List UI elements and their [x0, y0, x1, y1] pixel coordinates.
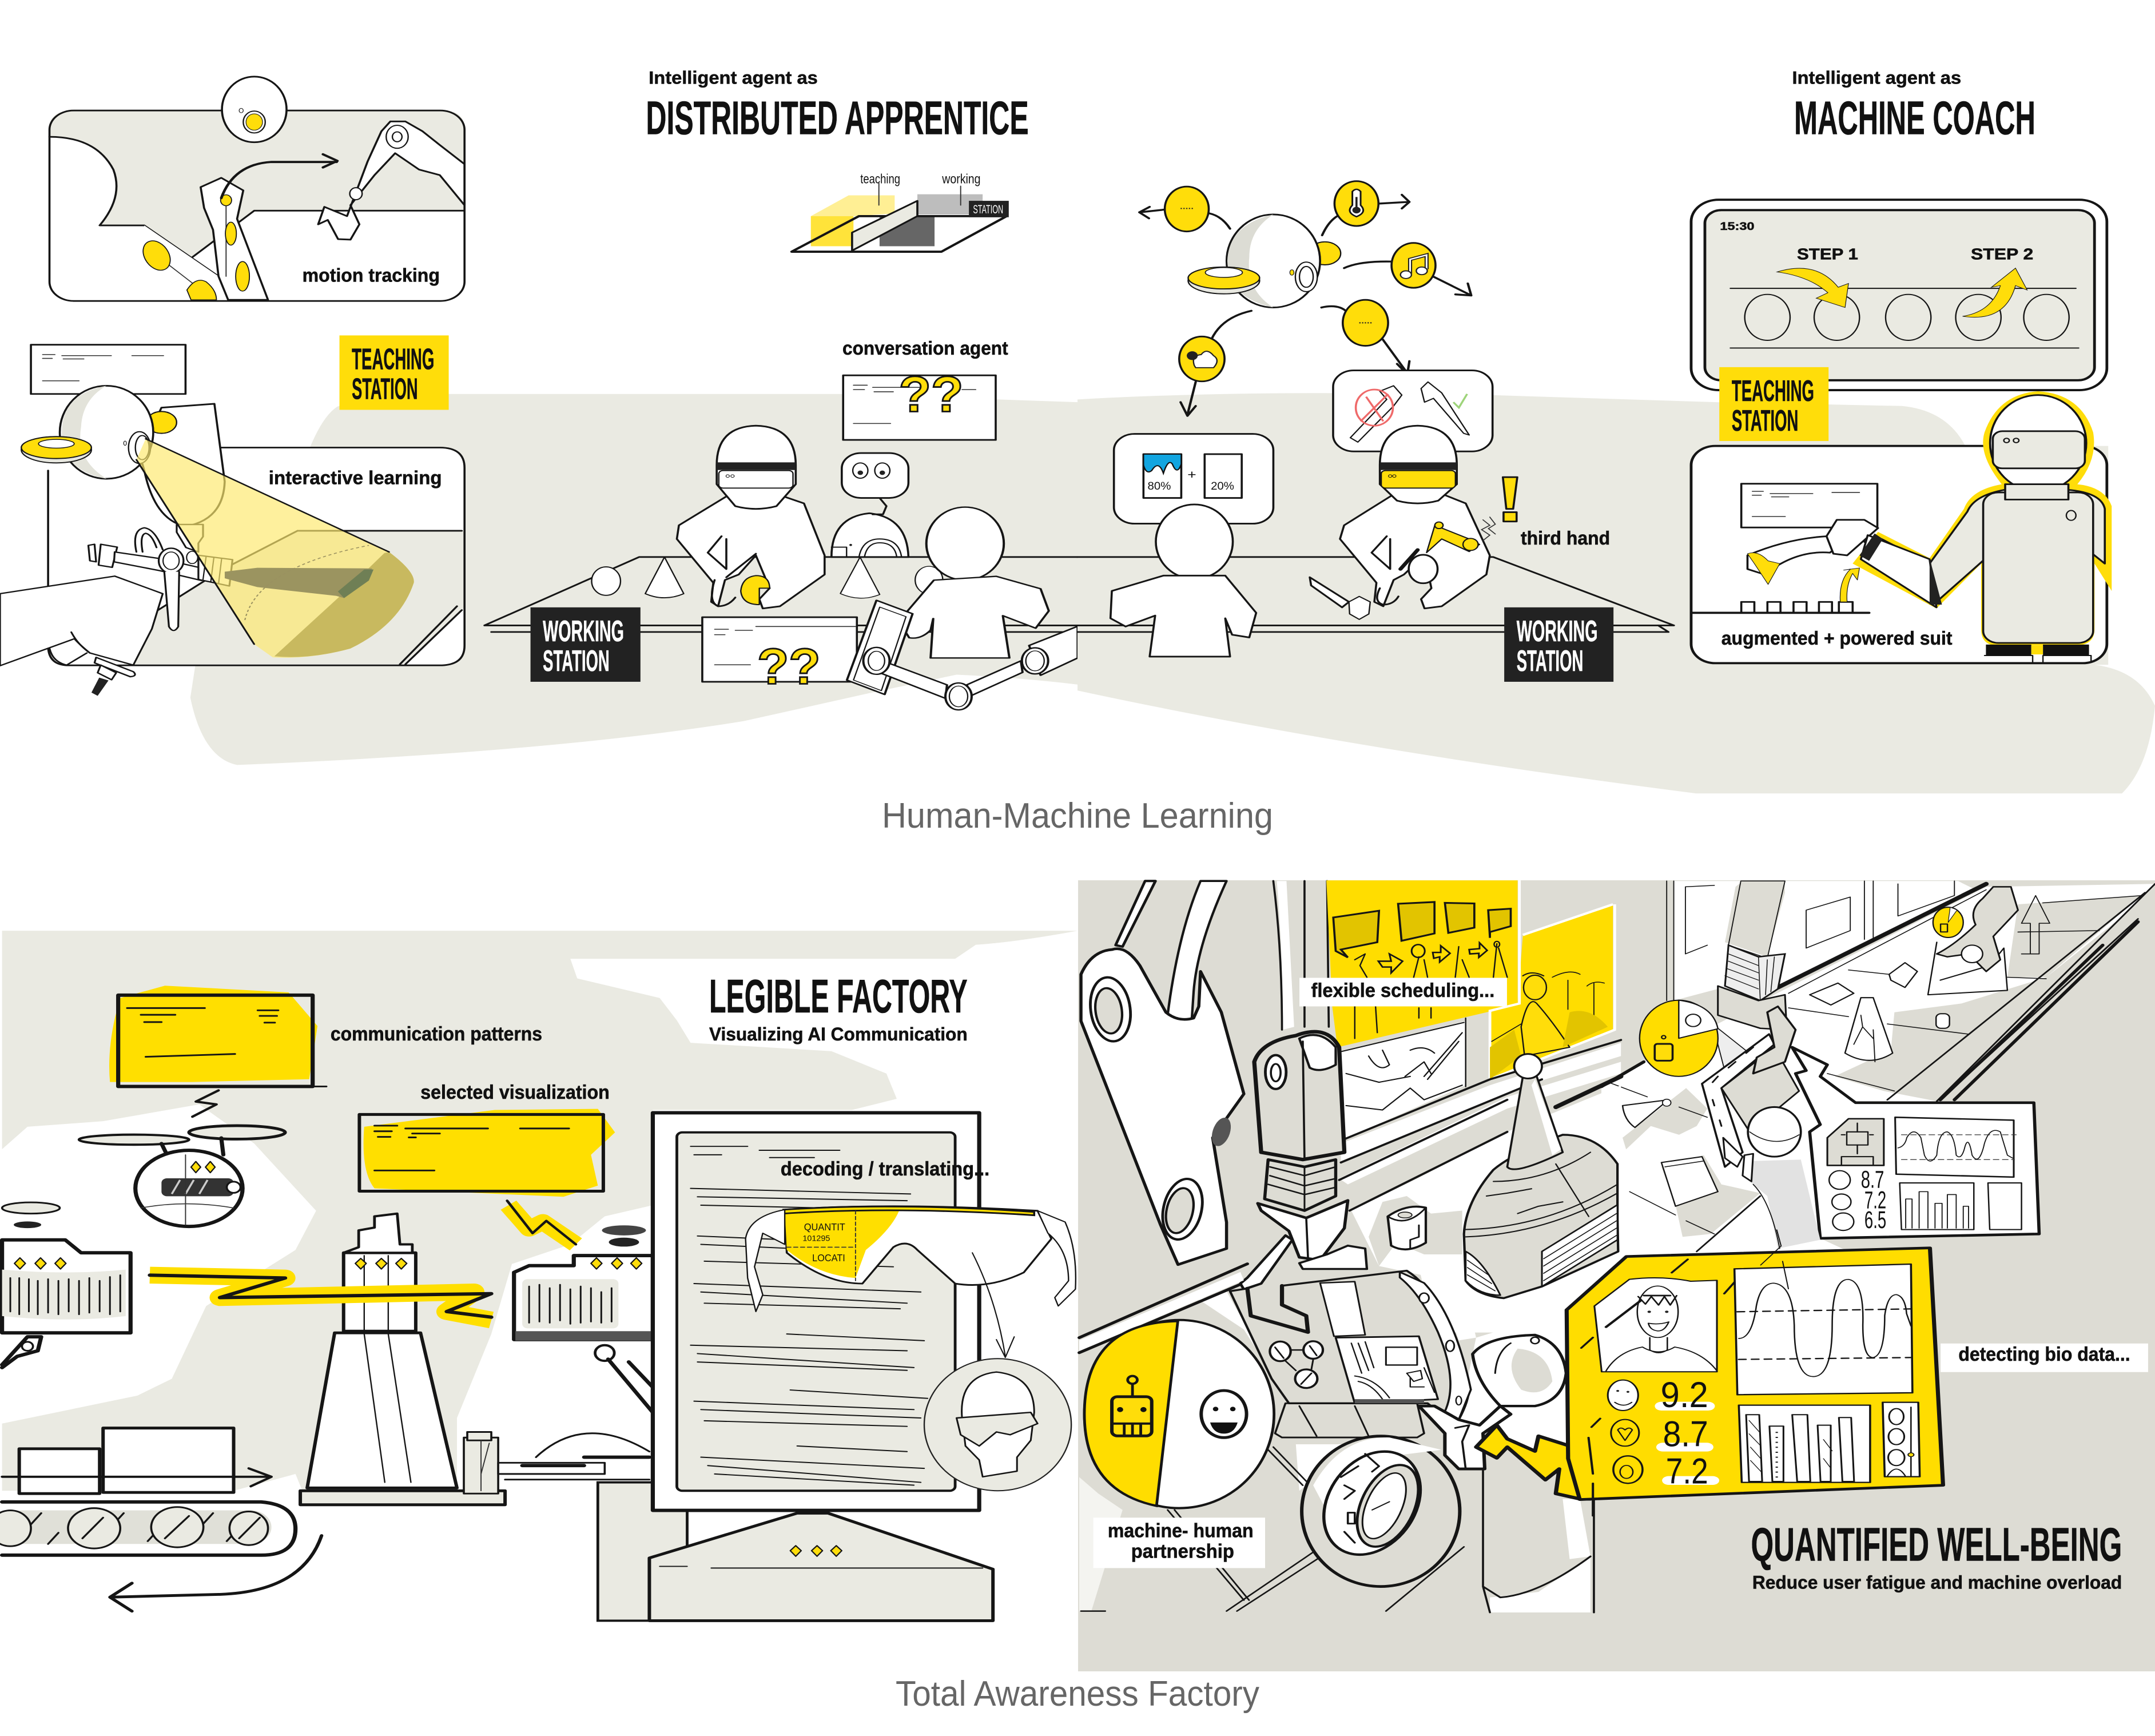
callout: communication patterns [109, 986, 542, 1117]
callout: mixing ratio: 80% [1148, 480, 1171, 492]
chart: far partnership pie [1933, 907, 1963, 937]
label: flexible scheduling: flexible scheduling... [1311, 979, 1494, 1002]
panel: quantified well-being overlays [1084, 907, 2148, 1593]
illustration: worker with third hand robot [1310, 426, 1490, 619]
arrow: step one [1777, 268, 1848, 308]
chart: side meter [1883, 1403, 1920, 1477]
icon: camera sensor [222, 77, 287, 142]
title: distributed apprentice [646, 67, 1029, 144]
icon: yellow data lightning [1476, 1425, 1591, 1499]
diagram: teaching and working station [792, 171, 1009, 252]
panel: small robot dashboard: 7.2 [1864, 1187, 1886, 1214]
arrow: step two [1963, 268, 2027, 317]
panel: legible factory [0, 931, 1078, 1620]
illustration: seated learner [1111, 504, 1256, 657]
icon: eye camera agent [21, 386, 177, 479]
arrow: yellow signal lightning [150, 1258, 491, 1320]
illustration: conveyor belt [0, 1428, 296, 1555]
title: legible factory [709, 970, 968, 1044]
illustration: floor lines [1081, 1447, 1464, 1611]
illustration: worker body [1483, 1469, 1594, 1612]
panel: small robot dashboard: 6.5 [1864, 1206, 1886, 1234]
icon: hand holding gun [0, 576, 163, 696]
icon: left machine [2, 1202, 130, 1368]
panel: distributed apprentice: DISTRIBUTED APPRENTICE [646, 91, 1029, 144]
illustration: smart goggles: QUANTIT [804, 1222, 845, 1233]
illustration: upper arm strips [1116, 881, 1227, 1020]
icon: tower machine [300, 1214, 505, 1505]
panel: small robot dashboard: 8.7 [1861, 1166, 1884, 1194]
label: decoding / translating: decoding / translating... [781, 1158, 989, 1180]
illustration: worker with helmet [677, 426, 825, 609]
icon: smart ring in circle [1302, 1436, 1460, 1587]
working station label: STATION [1517, 645, 1583, 677]
arrow: selected signal stroke [507, 1201, 576, 1245]
illustration: seated learner [904, 507, 1049, 658]
callout: learner screen: ?? [757, 639, 821, 695]
icons: wellbeing scores: 7.2 [1666, 1451, 1708, 1491]
diagram: teaching and working station: STATION [973, 203, 1003, 216]
arrow: motion path [221, 154, 337, 198]
icon: sphere on table [915, 566, 943, 594]
section caption: total awareness factory: Total Awareness Factory [896, 1674, 1259, 1714]
illustration: table [1078, 557, 1674, 632]
illustration: smart goggles: 101295 [802, 1234, 830, 1243]
title: quantified well-being [1751, 1518, 2122, 1593]
illustration: arm link with joints [1081, 949, 1244, 1265]
illustration: window frame [1273, 881, 1329, 1030]
arrow: return path [110, 1536, 321, 1611]
label and callout: selected visualization [359, 1082, 615, 1197]
chart: bio signal wave [1735, 1230, 1913, 1395]
title: machine coach: Intelligent agent as [1792, 67, 1961, 88]
icon: far floor objects [1623, 887, 2050, 1206]
icon: conversation robot [832, 453, 908, 557]
working station label [531, 607, 641, 682]
callout: conversation screen [843, 367, 996, 440]
illustration: smart goggles: LOCATI [812, 1253, 845, 1264]
chart: small partnership pie [1640, 1000, 1718, 1076]
panel: motion tracking [50, 77, 464, 301]
label and callout: selected visualization: selected visualization [420, 1082, 610, 1103]
heading: teaching station [340, 335, 449, 410]
illustration: learner with robot arm and tablet [840, 507, 1078, 710]
callout: learner screen [702, 617, 857, 695]
illustration: gripper column [1240, 1032, 1367, 1289]
callout: mixing ratio [1114, 434, 1273, 523]
icon: spray gun [88, 525, 232, 630]
working station label [1504, 607, 1613, 682]
icon: tracked arm [138, 178, 268, 300]
illustration: floor patches [1079, 1258, 1579, 1611]
icon: drone [79, 1126, 285, 1226]
panel: step screen [1691, 200, 2107, 390]
panel: step screen: 15:30 [1720, 220, 1754, 232]
chart: machine-human partnership pie [1084, 1320, 1274, 1508]
callout: mixing ratio: 20% [1211, 480, 1234, 492]
arrow: selected signal [508, 1205, 576, 1245]
label: motion tracking: motion tracking [303, 265, 440, 287]
icons: sensor bubbles with arrows [1139, 181, 1471, 416]
panel: quantified well-being background [1078, 880, 2155, 1671]
panel: step screen: STEP 1 [1797, 245, 1858, 263]
title: distributed apprentice: Intelligent agent as [649, 67, 818, 88]
label: machine-human partnership: partnership [1131, 1540, 1234, 1563]
chart: spray cone [136, 439, 414, 658]
illustration: machine housing [1230, 1271, 1471, 1437]
label: machine-human partnership: machine- human [1108, 1520, 1254, 1542]
illustration: powered suit figure [1852, 391, 2112, 662]
panel: interactive learning [48, 404, 464, 665]
callout: tool choice [1333, 371, 1493, 451]
icon: smiley [1201, 1391, 1247, 1437]
icon: cone on table [840, 557, 880, 598]
panel: yellow schedule boards [1326, 880, 1615, 1079]
illustration: worker cap and arm [1419, 1335, 1566, 1469]
icon: robot face [1112, 1376, 1152, 1436]
callout: mixing ratio: + [1187, 468, 1196, 482]
icon: robot arm [318, 121, 464, 240]
heading: teaching station: TEACHING [352, 343, 434, 376]
icon: small screen [31, 345, 185, 394]
panel: interactive learning: interactive learning [269, 468, 442, 489]
label: machine-human partnership [1094, 1517, 1265, 1568]
icon: head with goggles [924, 1358, 1071, 1491]
illustration: robot arm, board and cone robot [1081, 880, 1621, 1333]
panel: augmented suit [1691, 391, 2112, 663]
panel: legible factory: LEGIBLE FACTORY [709, 970, 968, 1023]
heading: teaching station: STATION [352, 373, 418, 406]
panel: augmented suit: augmented + powered suit [1721, 628, 1953, 649]
heading: teaching station [1719, 367, 1828, 441]
chart: bars [1739, 1405, 1870, 1483]
illustration: monitor [598, 1113, 993, 1620]
illustration: table and objects [484, 557, 1078, 632]
title: legible factory: Visualizing AI Communication [709, 1024, 968, 1044]
illustration: far worker [1723, 1107, 1820, 1249]
working station label: STATION [543, 645, 610, 677]
panel: step screen: STEP 2 [1971, 245, 2033, 263]
icon: alert exclamation [1481, 477, 1517, 541]
chart: photo of worker [1595, 1278, 1717, 1372]
diagram: teaching and working station: working [942, 171, 981, 186]
working station label: WORKING [1517, 615, 1598, 648]
panel: machine coach [1078, 67, 2155, 793]
panel: worker bio-data dashboard [1566, 1230, 1943, 1516]
heading: teaching station: TEACHING [1732, 375, 1814, 408]
icon: eye camera agent [1188, 214, 1341, 308]
panel: small robot dashboard [1792, 1047, 2039, 1238]
section caption: human-machine learning: Human-Machine Learning [882, 796, 1273, 836]
illustration: arm column and clamp [1702, 881, 1799, 1167]
illustration: window sill [1339, 1040, 1621, 1210]
label: detecting bio data [1941, 1344, 2148, 1372]
illustration: cone robot [1464, 1054, 1618, 1298]
illustration: smart goggles [746, 1206, 1076, 1357]
heading: teaching station: STATION [1732, 404, 1798, 437]
diagram: teaching and working station: teaching [860, 171, 900, 186]
illustration: spray gun, arm and vision cone [0, 439, 414, 696]
icon: floor tape roll [1387, 1206, 1426, 1249]
illustration: actuator and rail [464, 1432, 649, 1493]
label: conversation agent: conversation agent [842, 338, 1008, 359]
title: machine coach [1792, 67, 2035, 144]
callout: communication patterns: communication patterns [331, 1023, 542, 1045]
illustration: control unit, smart ring and worker [1079, 1258, 1594, 1612]
label: third hand: third hand [1521, 528, 1610, 549]
illustration: lower window sketch [1341, 1018, 1466, 1139]
icons: wellbeing scores: 8.7 [1663, 1414, 1708, 1454]
label: flexible scheduling [1299, 978, 1507, 1006]
panel: distributed apprentice [21, 67, 1078, 765]
icon: right machine [514, 1225, 653, 1412]
icon: tablet on robot arm [847, 601, 1078, 710]
icons: wellbeing scores [1608, 1375, 1712, 1491]
working station label: WORKING [543, 615, 624, 648]
illustration: factory rear floor and wall [1601, 881, 2155, 1278]
icons: wellbeing scores: 9.2 [1661, 1375, 1708, 1415]
callout: conversation screen: ?? [899, 367, 964, 423]
icon: spray cup [140, 404, 225, 526]
